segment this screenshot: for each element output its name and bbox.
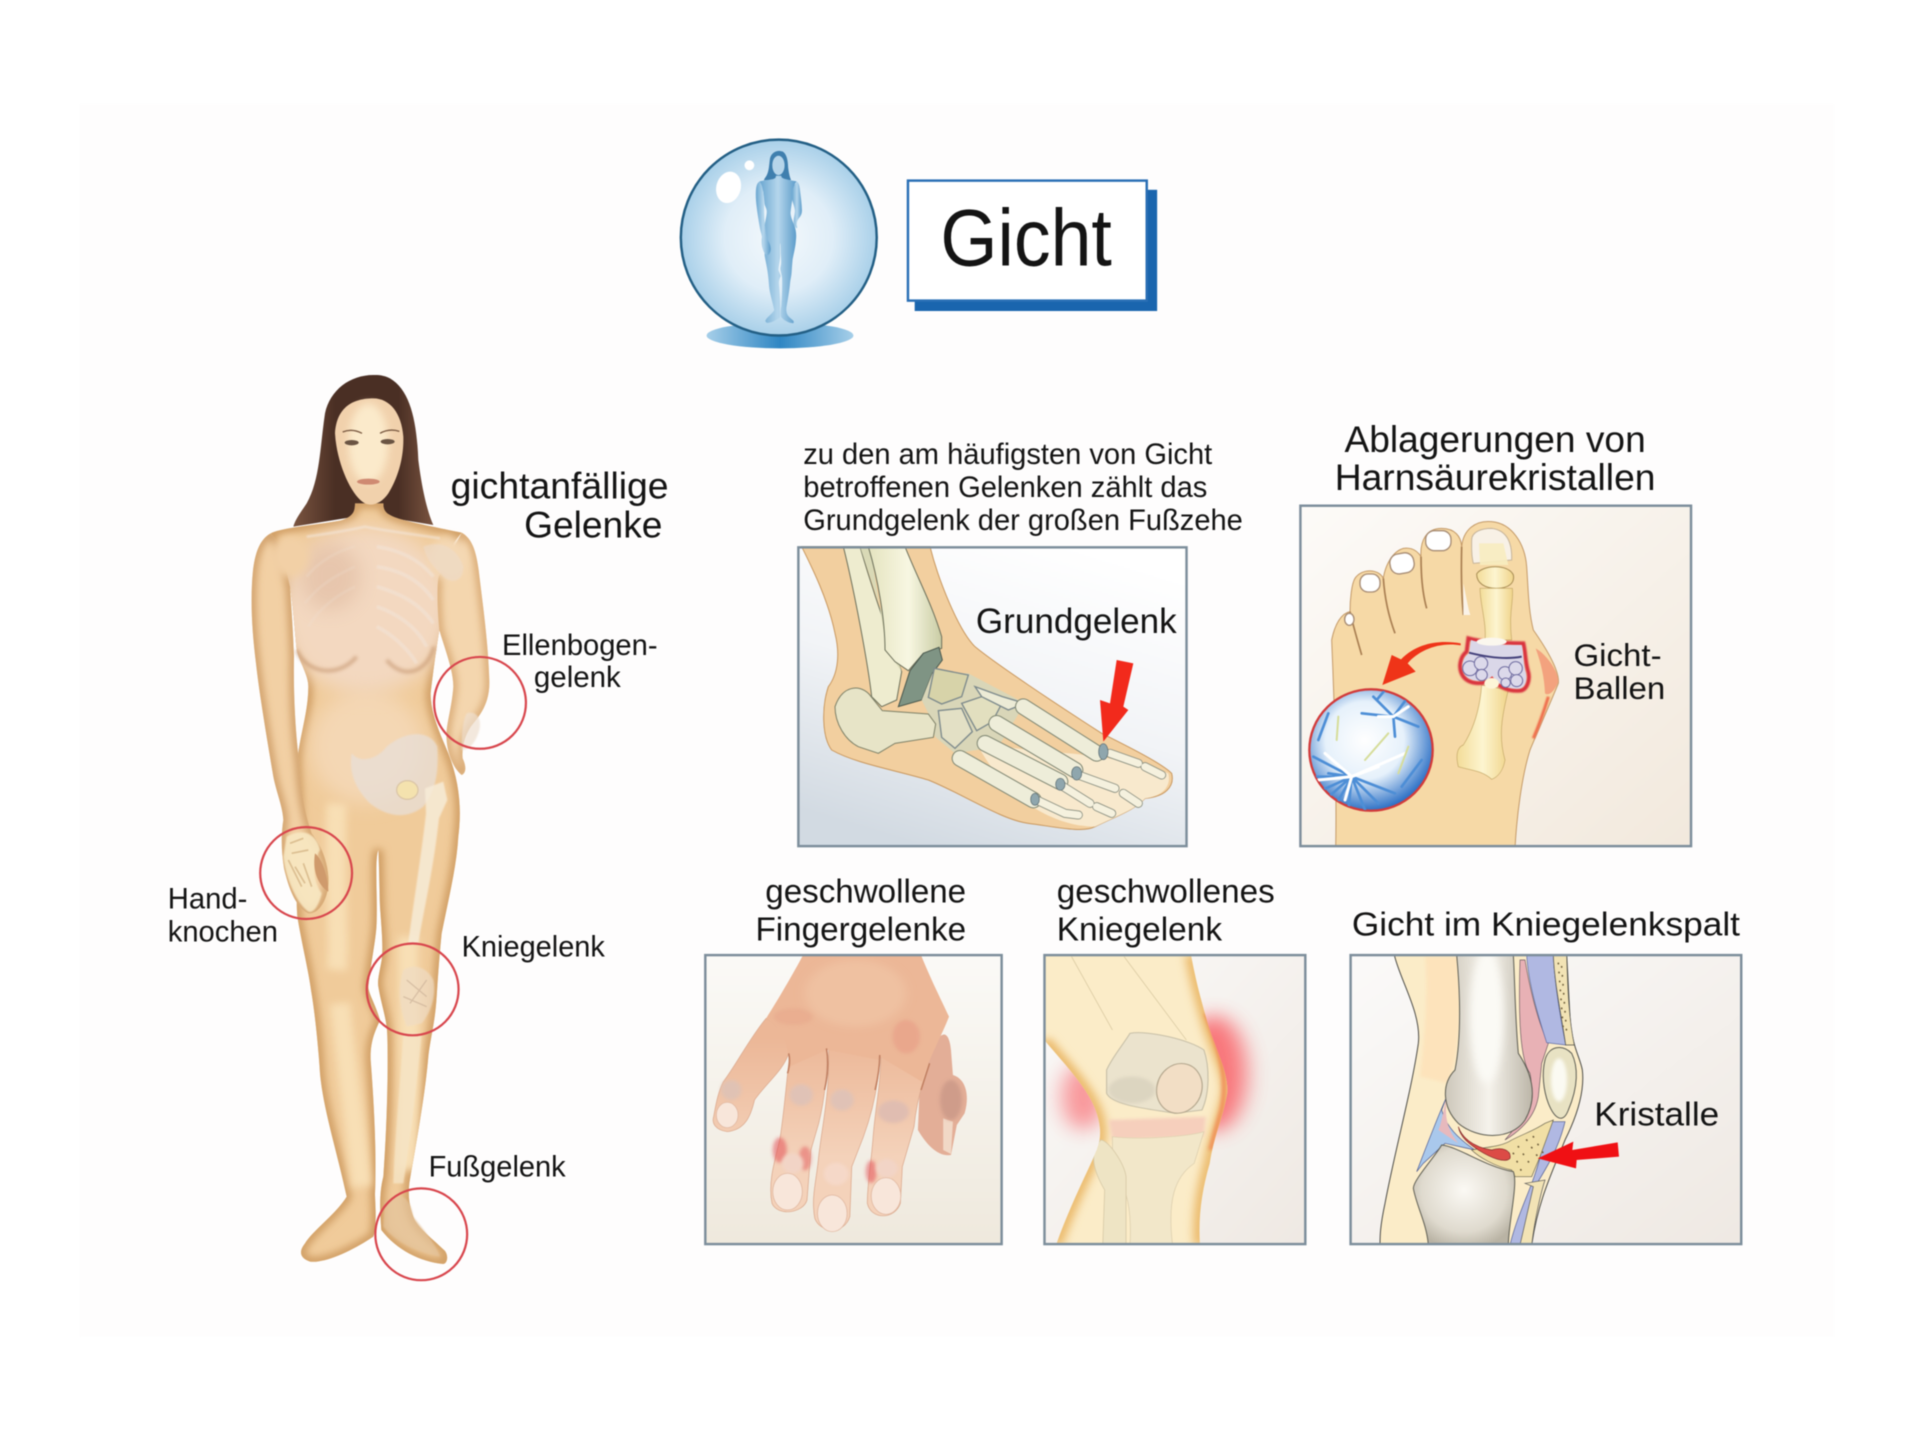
label: elbow [502,629,658,694]
label: hand [168,883,278,949]
caption: swollen finger joints: Fingergelenke [756,911,966,948]
caption: most affected joint [803,438,1243,537]
figure: female body with joints [252,375,489,1264]
label: Grundgelenk [976,601,1177,641]
chest shading and ribs [297,507,463,783]
label: Ballen [1573,670,1665,706]
caption: swollen knee: geschwollenes [1057,873,1275,910]
caption: swollen finger joints [756,873,966,948]
caption: most affected joint: zu den am häufigsten von Gicht [803,438,1212,471]
caption: most affected joint: betroffenen Gelenken zählt das [803,471,1207,504]
caption: swollen knee: Kniegelenk [1057,911,1223,948]
panel: knee joint section [1351,950,1741,1245]
caption: swollen finger joints: geschwollene [765,873,966,910]
arms [252,533,489,913]
label: ankle: Fußgelenk [429,1151,566,1184]
icon: crystal ball with figure [681,140,877,348]
arrow [1100,660,1133,742]
panel: swollen hand [705,955,1002,1244]
highlighted joint: hand [260,827,352,919]
label: hand: Hand- [168,883,247,916]
pelvis and leg bones [283,713,480,1257]
label: knee: Kniegelenk [462,930,605,963]
label: Gicht- [1573,637,1662,673]
label: elbow: Ellenbogen- [502,629,658,662]
page background [80,104,1834,1337]
heading: crystals [1335,419,1656,498]
highlighted joint: knee [367,943,459,1035]
face [335,398,403,505]
hair [293,375,433,527]
highlighted joint: elbow [434,657,526,749]
hand illustration [713,955,967,1232]
arrow [1538,1142,1619,1168]
label: hand: knochen [168,916,278,949]
heading: prone joints [451,465,669,546]
foot illustration [802,547,1172,830]
joint illustration [1380,950,1583,1245]
caption: gout in knee joint gap: Gicht im Kniegelenkspalt [1352,907,1740,944]
panel: big toe with crystals [1300,506,1691,848]
gouty tophus [1460,638,1529,691]
highlighted joint: ankle [375,1188,467,1280]
title box [908,181,1157,311]
crystal magnifier [1309,689,1433,811]
label: elbow: gelenk [534,661,621,694]
label: Kristalle [1594,1096,1719,1133]
caption: most affected joint: Grundgelenk der großen Fußzehe [803,504,1243,537]
torso and legs [271,503,462,1264]
bunion inflammation [1536,648,1558,694]
panel: swollen knee [1044,955,1305,1247]
label [1573,637,1665,706]
knee illustration [1044,955,1247,1247]
panel: foot skeleton [798,547,1187,846]
title box: Gicht [940,194,1112,284]
foot illustration [1309,521,1558,848]
caption: swollen knee [1057,873,1275,948]
heading: prone joints: Gelenke [524,505,662,546]
heading: prone joints: gichtanfällige [451,465,669,506]
heading: crystals: Harnsäurekristallen [1335,457,1656,498]
heading: crystals: Ablagerungen von [1344,419,1646,460]
curved red arrow [1382,642,1461,685]
